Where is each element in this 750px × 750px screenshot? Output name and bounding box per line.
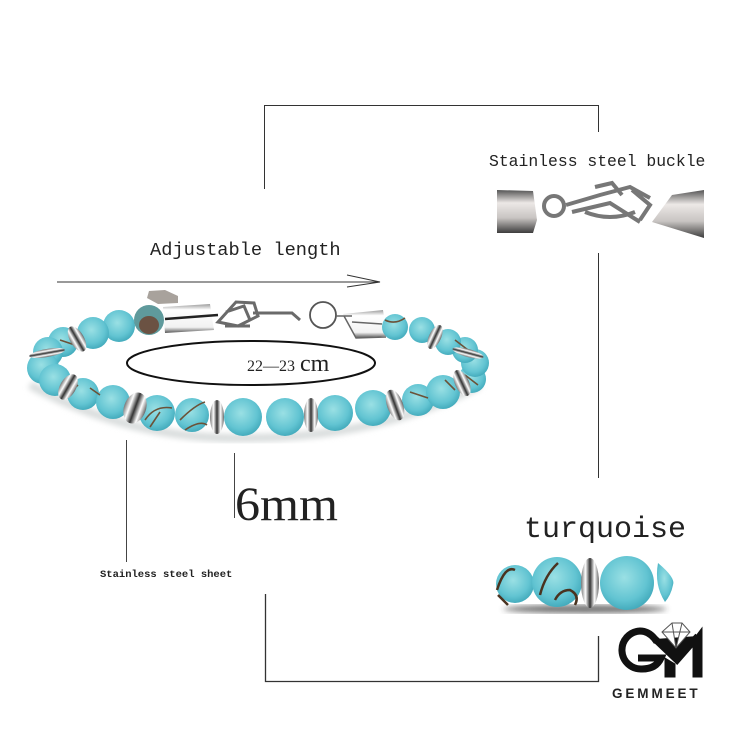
logo G letter (622, 631, 661, 669)
clasp tab (147, 290, 178, 304)
frame line: right connector (598, 253, 600, 478)
bead veins (60, 318, 478, 430)
label: stainless steel buckle: Stainless steel buckle (489, 152, 705, 171)
label: 6mm: 6mm (235, 478, 338, 531)
logo M letter (655, 628, 702, 677)
turquoise beads (27, 310, 489, 436)
clasp chain (218, 302, 300, 326)
label: stainless steel sheet: Stainless steel sheet (100, 569, 232, 581)
size ellipse (127, 341, 375, 385)
logo wordmark: GEMMEET (612, 686, 701, 701)
heading: adjustable length: Adjustable length (150, 239, 341, 261)
photo: buckle closeup (497, 183, 704, 238)
leader line: bead size (234, 453, 236, 518)
clasp left cap (163, 304, 214, 333)
clasp right cap (343, 310, 387, 338)
arrow: adjustable length (57, 275, 380, 287)
leader line: spacer (126, 440, 128, 562)
frame line: top bracket (264, 106, 598, 189)
bracelet shadow (30, 385, 480, 438)
steel spacers (29, 323, 484, 434)
logo diamond (662, 623, 690, 648)
photo: turquoise beads closeup (496, 556, 673, 613)
size label: 22—23cm (247, 351, 330, 377)
bracelet (27, 290, 489, 438)
label: turquoise: turquoise (524, 513, 686, 547)
frame line: bottom bracket (266, 594, 598, 682)
logo: gemmeet (612, 623, 702, 701)
brown bead by clasp (134, 305, 164, 335)
